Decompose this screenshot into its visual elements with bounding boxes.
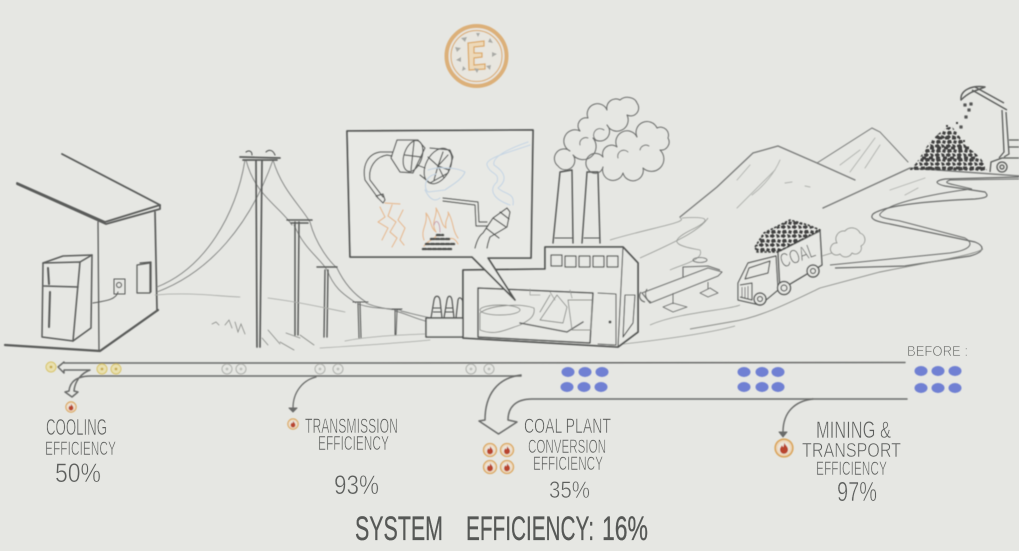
- label: coal plant conversion efficiency: CONVERSION: [528, 437, 606, 458]
- power lines and poles: [155, 150, 432, 350]
- hills and mountains: [680, 128, 1019, 217]
- coal pile at mine: [910, 122, 987, 171]
- label: cooling efficiency: COOLING: [46, 414, 107, 440]
- transformers: [426, 296, 463, 337]
- winding road: [610, 177, 1019, 345]
- title: system efficiency: EFFICIENCY:: [466, 510, 594, 548]
- coal load: [755, 220, 820, 252]
- top flow line with cooling arrow: [58, 362, 905, 397]
- mining and transport loss arrow: [779, 399, 813, 437]
- coal units: blue: [560, 366, 962, 393]
- label: coal plant conversion efficiency: 35%: [549, 477, 590, 504]
- truck cab: [738, 256, 778, 305]
- inset panel: inside the coal plant: [347, 130, 533, 300]
- label: before: BEFORE :: [907, 343, 968, 360]
- energy units: yellow: [46, 362, 121, 374]
- title: system efficiency: SYSTEM: [355, 510, 443, 548]
- pole 1: [240, 150, 280, 347]
- label: cooling efficiency: EFFICIENCY: [45, 439, 116, 460]
- electric meter box: [137, 262, 151, 293]
- energy flow arrows: [58, 362, 907, 437]
- coal truck: [738, 220, 865, 305]
- coal plant building: [463, 97, 669, 347]
- fire flames: [423, 208, 458, 246]
- label: mining and transport efficiency: [802, 417, 901, 507]
- exhaust puffs: [822, 228, 865, 257]
- house: [5, 154, 160, 351]
- label: mining and transport efficiency: TRANSPORT: [802, 440, 901, 462]
- lightning electricity: [378, 203, 405, 247]
- label: mining and transport efficiency: EFFICIENCY: [816, 459, 887, 480]
- door and side panel: [598, 293, 635, 345]
- label: mining and transport efficiency: 97%: [837, 476, 877, 507]
- label: transmission efficiency: EFFICIENCY: [318, 433, 389, 455]
- label: cooling efficiency: 50%: [55, 458, 101, 488]
- water stream: [487, 142, 530, 205]
- label: coal plant conversion efficiency: COAL PLANT: [524, 415, 611, 438]
- pole 4: [353, 302, 368, 338]
- fridge: [42, 255, 92, 341]
- pole 3: [317, 267, 337, 337]
- transmission loss arrow: [289, 377, 316, 412]
- cutaway interior: [478, 288, 593, 343]
- pole 5: [392, 309, 402, 335]
- label: coal plant conversion efficiency: [524, 415, 611, 504]
- windows: [551, 255, 618, 267]
- generator and turbine: [364, 138, 458, 203]
- smoke stacks: [553, 170, 600, 243]
- smoke clouds: [554, 97, 669, 181]
- wall outlet and cord: [93, 279, 125, 303]
- steam: [425, 168, 465, 200]
- label: coal plant conversion efficiency: EFFICIENCY: [533, 454, 603, 475]
- truck label: COAL: [777, 240, 819, 273]
- coal plant loss arrow: [479, 375, 907, 434]
- label: transmission efficiency: TRANSMISSION: [305, 415, 398, 438]
- title: system efficiency: [355, 510, 648, 548]
- heat loss flames: [66, 402, 793, 474]
- label: transmission efficiency: 93%: [334, 470, 379, 500]
- excavator: [960, 87, 1019, 172]
- label: cooling efficiency: [45, 414, 116, 488]
- logo: energy badge: [446, 26, 506, 86]
- ground lines and grass: [155, 294, 430, 350]
- title: system efficiency: 16%: [602, 510, 648, 548]
- label: mining and transport efficiency: MINING &: [816, 417, 891, 444]
- steam pipe and boiler tube: [443, 198, 510, 248]
- energy units: gray: [222, 364, 494, 374]
- coal pipeline: [640, 258, 722, 312]
- coal pile under fire: [423, 235, 454, 249]
- pole 2: [287, 220, 312, 335]
- label: transmission efficiency: [305, 415, 398, 500]
